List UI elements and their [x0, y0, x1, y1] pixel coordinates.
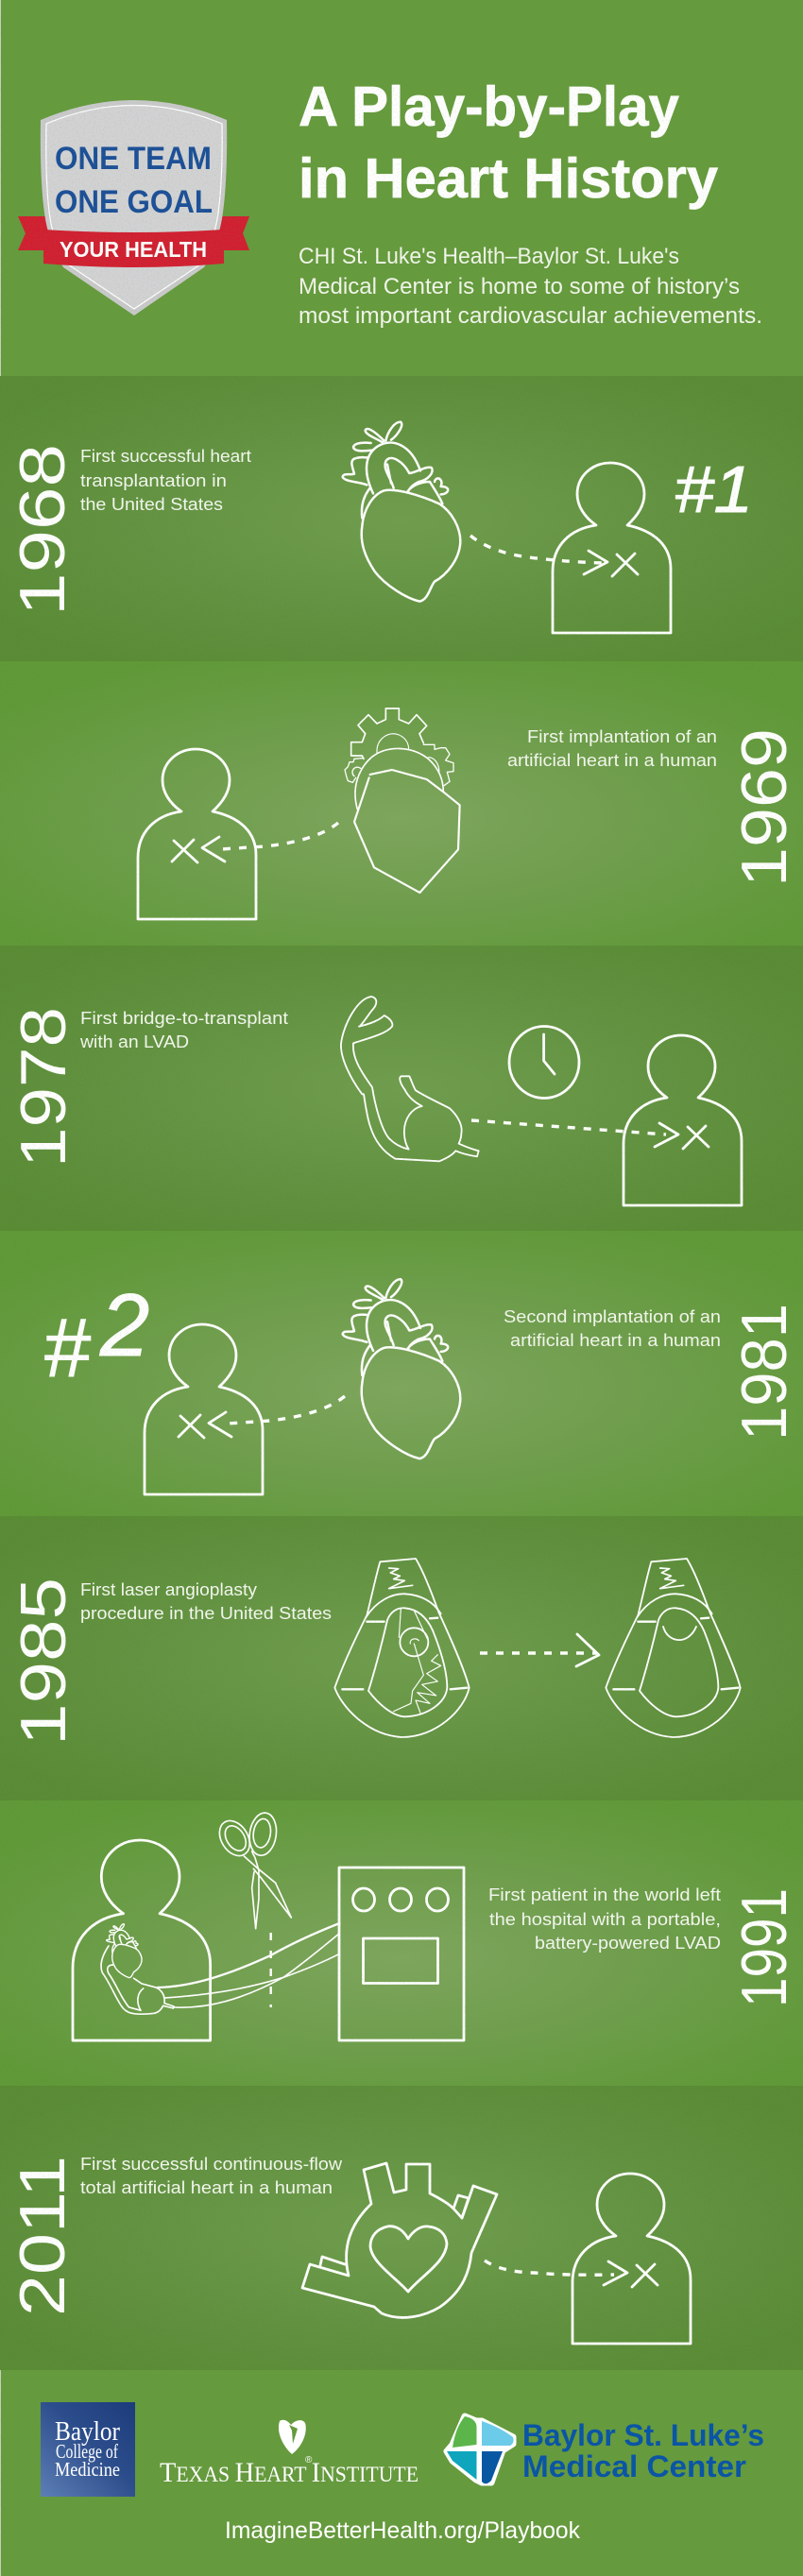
icon: total artificial heart: [302, 2163, 497, 2317]
number 2: 2: [99, 1275, 149, 1374]
description: with an LVAD: [79, 1032, 189, 1051]
year 1985: 1985: [8, 1578, 79, 1746]
year 1968: 1968: [7, 444, 78, 616]
description: the hospital with a portable,: [489, 1909, 721, 1929]
panel: 1968: [0, 376, 803, 661]
footer logos: [41, 2402, 764, 2544]
logo text: Baylor St. Luke's Medical Center: Medical Center: [522, 2449, 746, 2483]
badge: one team one goal shield: ONE TEAM: [55, 141, 212, 177]
description: total artificial heart in a human: [80, 2177, 333, 2197]
icon: artery with plaque and laser: [334, 1559, 470, 1737]
intro text: [299, 244, 762, 329]
year 1978: 1978: [8, 1007, 79, 1168]
panel: 2011: [0, 2086, 803, 2370]
year 1981: 1981: [728, 1304, 800, 1441]
badge: one team one goal shield: [18, 100, 249, 316]
icon: heart: [343, 1279, 460, 1459]
arrow: [470, 536, 605, 563]
number 2: #: [43, 1301, 91, 1394]
icon: scissors: [214, 1811, 291, 1929]
intro text: Medical Center is home to some of history’s: [299, 274, 740, 299]
panel: 1985: [0, 1516, 803, 1800]
panel: 1981: [0, 1231, 803, 1516]
icon: battery pack: [339, 1868, 464, 2040]
icon: person: [138, 749, 256, 919]
description: [488, 1885, 721, 1953]
description: First bridge-to-transplant: [80, 1008, 288, 1028]
description: First successful continuous-flow: [80, 2154, 343, 2174]
cut line: [269, 1933, 272, 2007]
arrow: [471, 1120, 666, 1134]
description: the United States: [80, 494, 223, 514]
description: First patient in the world left: [488, 1885, 721, 1904]
icon: artificial heart with gears: [345, 708, 460, 893]
title: A Play-by-Play: [299, 76, 679, 138]
icon: person: [624, 1035, 742, 1205]
description: [79, 1008, 288, 1051]
panel: 1978: [0, 946, 803, 1231]
icon: person: [572, 2174, 691, 2344]
title: [299, 76, 718, 210]
left edge line: [0, 0, 1, 2576]
description: Second implantation of an: [504, 1306, 721, 1326]
logo text: Baylor St. Luke's Medical Center: [522, 2418, 764, 2483]
intro text: CHI St. Luke's Health–Baylor St. Luke's: [299, 244, 679, 269]
description: First successful heart: [80, 446, 251, 466]
header panel: [18, 76, 762, 329]
icon: LVAD: [341, 997, 479, 1161]
logo: Baylor College of Medicine: Baylor: [55, 2416, 120, 2447]
description: [80, 1579, 332, 1623]
description: procedure in the United States: [80, 1603, 332, 1623]
panel: 1991: [0, 1800, 803, 2086]
title: in Heart History: [299, 147, 718, 210]
description: First implantation of an: [527, 726, 717, 746]
icon: person: [145, 1324, 263, 1494]
panel: 1969: [0, 661, 803, 946]
logo: Texas Heart Institute: TEXAS HEART INSTITUTE: [160, 2457, 419, 2488]
arrow: [480, 1651, 597, 1655]
logo: Baylor St. Luke's cross: [447, 2416, 514, 2483]
description: [80, 2154, 343, 2197]
badge: one team one goal shield: YOUR HEALTH: [60, 237, 207, 262]
arrow: [228, 1396, 345, 1424]
description: [507, 726, 717, 770]
year 1991: 1991: [728, 1888, 800, 2007]
logo: Texas Heart Institute: ®: [305, 2455, 313, 2465]
year 2011: 2011: [7, 2156, 78, 2316]
description: First laser angioplasty: [80, 1579, 258, 1599]
logo text: Baylor St. Luke's Medical Center: Baylor St. Luke’s: [522, 2418, 764, 2452]
intro text: most important cardiovascular achievements.: [299, 303, 762, 329]
icon: person with implanted LVAD: [73, 1840, 211, 2040]
logo: Texas Heart Institute: [160, 2420, 419, 2488]
description: artificial heart in a human: [510, 1330, 721, 1350]
description: artificial heart in a human: [507, 750, 717, 770]
logo: Baylor College of Medicine: College of: [56, 2440, 118, 2463]
arrow: [221, 823, 338, 849]
year 1969: 1969: [728, 728, 800, 887]
website url: ImagineBetterHealth.org/Playbook: [225, 2517, 580, 2544]
icon: heart: [343, 422, 460, 602]
description: [80, 446, 251, 514]
arrowhead: [576, 1634, 599, 1666]
number 1: #1: [675, 452, 753, 526]
description: battery-powered LVAD: [535, 1933, 721, 1953]
description: transplantation in: [80, 470, 227, 490]
description: [504, 1306, 721, 1350]
icon: person: [553, 463, 671, 633]
icon: clock: [509, 1026, 579, 1098]
logo: Baylor College of Medicine: Medicine: [55, 2458, 120, 2481]
arrow: [485, 2260, 614, 2275]
badge: one team one goal shield: ONE GOAL: [55, 184, 213, 220]
cables: [158, 1923, 339, 2007]
logo: Baylor College of Medicine: [41, 2402, 135, 2497]
icon: cleared artery: [606, 1559, 741, 1737]
